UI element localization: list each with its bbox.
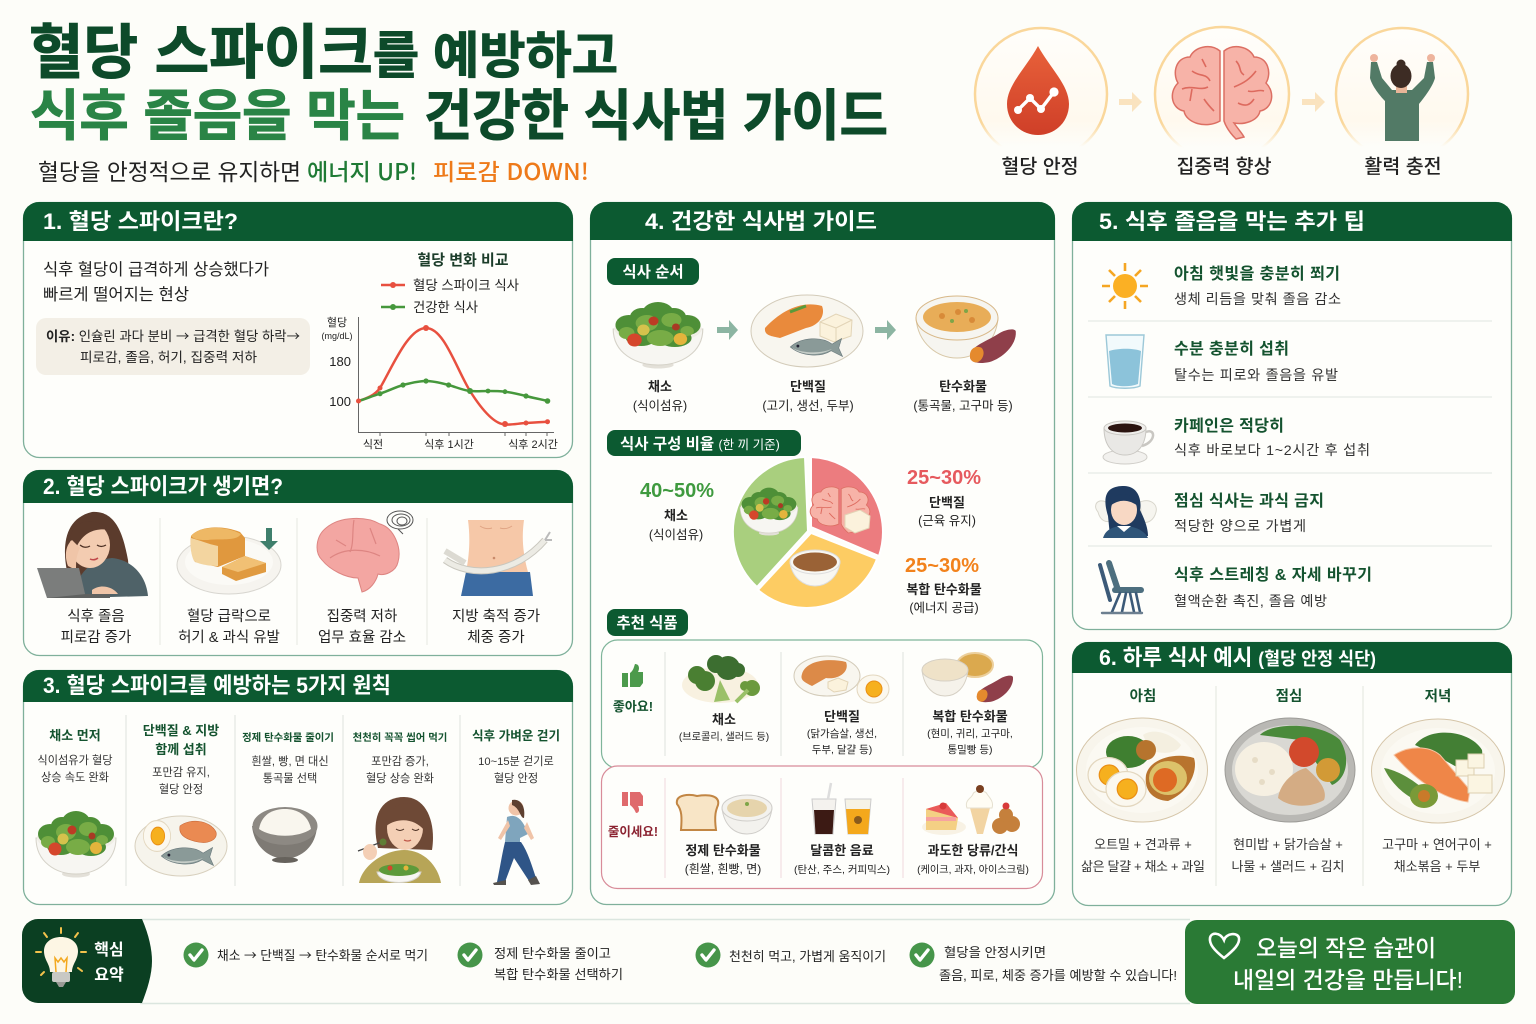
benefit: focus improvement: 집중력 향상	[1176, 156, 1272, 178]
title: 식후 졸음을 막는	[30, 85, 405, 147]
panel: 1 what is a blood sugar spike	[23, 202, 573, 458]
caption: fat storage: 체중 증가	[467, 629, 525, 646]
food: vegetables: (브로콜리, 샐러드 등)	[679, 731, 769, 743]
summary item 2: 복합 탄수화물 선택하기	[494, 967, 623, 982]
principle 4 text: 포만감 증가,	[371, 755, 429, 768]
summary item 3: 천천히 먹고, 가볍게 움직이기	[729, 949, 886, 964]
header 4	[590, 202, 1055, 240]
summary item 4	[910, 942, 1177, 983]
closing message text: 내일의 건강을 만듭니다!	[1233, 967, 1463, 993]
meal: lunch: 점심	[1276, 688, 1302, 705]
meal order: carbohydrates: 탄수화물	[939, 379, 987, 394]
line chart: blood sugar comparison: 혈당	[327, 315, 347, 329]
icon: thumbs up	[622, 664, 643, 687]
panel: good foods	[602, 640, 1042, 768]
icon: waist with measuring tape	[445, 520, 552, 596]
subtitle	[38, 153, 589, 187]
panel: key summary bar	[22, 919, 1515, 1004]
reason box: 이유: 인슐린 과다 분비 → 급격한 혈당 하락→	[46, 325, 300, 345]
pill: meal ratio	[607, 430, 801, 456]
food: protein: 단백질	[824, 709, 860, 724]
tip 2 text	[1174, 340, 1338, 384]
icon: coffee cup	[1103, 421, 1153, 464]
tip 2 text: 탈수는 피로와 졸음을 유발	[1174, 368, 1338, 384]
tip 3 text: 카페인은 적당히	[1174, 417, 1284, 435]
icon: woman eating slowly	[358, 797, 441, 883]
meal order: protein: (고기, 생선, 두부)	[762, 399, 854, 413]
label: good: 좋아요!	[613, 699, 653, 714]
benefit: blood sugar stability	[975, 28, 1107, 178]
line chart: blood sugar comparison: 식후 1시간	[424, 438, 474, 451]
caption: hunger: 혈당 급락으로	[187, 608, 271, 625]
food: protein	[794, 656, 889, 756]
food: sugary snacks: 과도한 당류/간식	[928, 843, 1018, 858]
subtitle: 혈당을 안정적으로 유지하면	[38, 159, 301, 185]
benefit: energy recharge: 활력 충전	[1364, 156, 1442, 178]
closing message text	[1233, 935, 1463, 993]
header 6	[1072, 642, 1512, 673]
principle 4 text: 혈당 상승 완화	[366, 771, 434, 785]
panel: 4 healthy eating guide	[590, 202, 1055, 904]
line chart: blood sugar comparison	[321, 252, 558, 451]
principle 5 text: 혈당 안정	[494, 771, 538, 785]
pie label: complex carbs: 복합 탄수화물	[906, 582, 982, 597]
line chart: blood sugar comparison: 식후 2시간	[508, 438, 558, 451]
heading 3: 3. 혈당 스파이크를 예방하는 5가지 원칙	[43, 673, 391, 698]
arrow: vegetables to protein	[717, 320, 738, 340]
caption: drowsiness	[61, 608, 131, 646]
summary tab	[22, 919, 152, 1003]
food: sweet drinks: 달콤한 음료	[810, 843, 874, 858]
heading 1: 1. 혈당 스파이크란?	[43, 209, 238, 234]
meal: lunch: 나물 + 샐러드 + 김치	[1232, 859, 1344, 874]
tip 1 text: 아침 햇빛을 충분히 쬐기	[1174, 264, 1340, 283]
title	[29, 20, 888, 147]
closing message box	[1185, 920, 1515, 1004]
tip 2 text: 수분 충분히 섭취	[1174, 340, 1289, 358]
meal order: protein	[751, 295, 863, 413]
arrow: focus to energy	[1302, 92, 1325, 112]
subtitle: 피로감 DOWN!	[433, 153, 589, 187]
pie label: vegetables: 40~50%	[640, 480, 714, 502]
principle 2 text: 포만감 유지,	[152, 766, 210, 779]
icon: woman napping	[1096, 486, 1156, 538]
icon: light bulb	[36, 928, 86, 987]
summary label: 요약	[94, 966, 124, 984]
panel: 5 additional tips	[1072, 202, 1512, 630]
principle 2 text: 함께 섭취	[155, 742, 207, 757]
tip 5 text: 혈액순환 촉진, 졸음 예방	[1174, 594, 1327, 610]
meal order: protein: 단백질	[790, 379, 826, 394]
caption: hunger: 허기 & 과식 유발	[178, 629, 280, 646]
tip 4 text: 적당한 양으로 가볍게	[1174, 519, 1306, 535]
principle 2 text: 단백질 & 지방	[143, 723, 219, 738]
principle 2 text: 혈당 안정	[159, 782, 203, 796]
line chart: blood sugar comparison: 180	[329, 354, 351, 369]
tip 4 text	[1174, 492, 1324, 535]
icon: walking person	[493, 800, 540, 885]
caption: drowsiness: 식후 졸음	[67, 608, 125, 625]
food: sweet drinks: (탄산, 주스, 커피믹스)	[794, 864, 890, 876]
caption: focus drop: 집중력 저하	[327, 608, 397, 625]
principle 3 text: 통곡물 선택	[263, 772, 317, 785]
label: reduce: 줄이세요!	[608, 825, 658, 839]
heading 4: 4. 건강한 식사법 가이드	[645, 209, 877, 234]
meal order: vegetables: (식이섬유)	[633, 399, 687, 413]
benefit: focus improvement	[1155, 27, 1289, 178]
caption: focus drop	[318, 608, 406, 646]
line chart: blood sugar comparison: 식전	[363, 438, 383, 451]
tip 1 text	[1174, 264, 1341, 308]
food: sweet drinks	[794, 783, 890, 876]
meal: lunch: 현미밥 + 닭가슴살 +	[1233, 837, 1343, 852]
icon: plate with egg salmon fish	[135, 816, 227, 876]
caption: drowsiness: 피로감 증가	[61, 629, 131, 646]
pill: meal ratio: 식사 구성 비율 (한 끼 기준)	[620, 435, 780, 453]
pie label: complex carbs: (에너지 공급)	[909, 601, 979, 615]
pie chart: meal composition	[733, 457, 883, 608]
line chart: blood sugar comparison: 100	[329, 394, 351, 409]
principle 3 text	[242, 731, 334, 785]
meal order: vegetables	[613, 302, 703, 413]
principle 1 text: 식이섬유가 혈당	[37, 753, 113, 767]
definition text	[43, 260, 269, 304]
line chart: blood sugar comparison: 혈당 변화 비교	[417, 252, 509, 269]
principle 5 text: 10~15분 걷기로	[478, 755, 554, 768]
pie label: vegetables: (식이섬유)	[649, 528, 703, 542]
summary item 3	[696, 942, 886, 968]
pie label: protein	[907, 467, 981, 528]
meal: dinner: 고구마 + 연어구이 +	[1382, 837, 1492, 852]
pill: meal order: 식사 순서	[622, 263, 684, 281]
pie label: vegetables	[640, 480, 714, 542]
icon: thumbs down	[622, 792, 643, 813]
heading 5: 5. 식후 졸음을 막는 추가 팁	[1099, 209, 1365, 234]
definition text: 식후 혈당이 급격하게 상승했다가	[43, 260, 269, 279]
header 5	[1072, 202, 1512, 241]
closing message text: 오늘의 작은 습관이	[1256, 935, 1436, 961]
food: protein: 두부, 달걀 등)	[812, 743, 872, 756]
caption: hunger	[178, 608, 280, 646]
food: complex carbs	[922, 653, 1013, 756]
caption: fat storage: 지방 축적 증가	[452, 608, 540, 625]
pill: meal order	[607, 258, 699, 285]
principle 4 text	[353, 731, 447, 785]
arrow: stability to focus	[1119, 92, 1142, 112]
panel: 6 daily meal example	[1072, 642, 1512, 906]
icon: bread plate with down arrow	[177, 527, 281, 594]
principle 1 text: 상승 속도 완화	[41, 771, 109, 784]
principle 5 text	[472, 729, 560, 785]
heading 6: 6. 하루 식사 예시 (혈당 안정 식단)	[1099, 645, 1376, 670]
food: complex carbs: 통밀빵 등)	[947, 744, 993, 756]
icon: chair	[1100, 563, 1142, 613]
principle 3 text: 흰쌀, 빵, 면 대신	[251, 755, 329, 768]
food: complex carbs: 복합 탄수화물	[932, 709, 1008, 724]
icon: drowsy woman at laptop	[37, 512, 148, 598]
pie label: complex carbs	[905, 555, 982, 615]
summary item 2	[458, 942, 623, 982]
summary label: 핵심	[94, 940, 124, 959]
principle 4 text: 천천히 꼭꼭 씹어 먹기	[353, 731, 447, 744]
food: refined carbs	[677, 795, 772, 876]
summary item 1	[184, 942, 428, 968]
meal: lunch	[1225, 688, 1355, 874]
meal: dinner: 저녁	[1425, 688, 1451, 705]
meal: breakfast: 삶은 달걀 + 채소 + 과일	[1081, 859, 1205, 874]
meal order: vegetables: 채소	[648, 379, 672, 394]
meal order: carbohydrates: (통곡물, 고구마 등)	[913, 399, 1013, 413]
principle 1 text: 채소 먼저	[49, 728, 101, 743]
principle 5 text: 식후 가벼운 걷기	[472, 729, 560, 743]
meal: breakfast: 아침	[1130, 688, 1156, 705]
title: 건강한 식사법 가이드	[424, 85, 888, 147]
food: complex carbs: (현미, 귀리, 고구마,	[927, 728, 1013, 740]
line chart: blood sugar comparison: (mg/dL)	[321, 331, 353, 341]
summary item 1: 채소 → 단백질 → 탄수화물 순서로 먹기	[217, 945, 428, 964]
food: vegetables: 채소	[712, 712, 736, 727]
pill: recommended foods	[607, 609, 688, 636]
summary item 4: 졸음, 피로, 체중 증가를 예방할 수 있습니다!	[939, 968, 1177, 983]
panel: foods to reduce	[602, 766, 1042, 888]
title: 혈당 스파이크를 예방하고	[29, 20, 618, 86]
benefit: blood sugar stability: 혈당 안정	[1001, 156, 1079, 178]
food: sugary snacks	[917, 785, 1029, 876]
principle 1 text	[37, 728, 113, 784]
tip 3 text	[1174, 417, 1370, 459]
definition text: 빠르게 떨어지는 현상	[43, 285, 189, 304]
summary item 2: 정제 탄수화물 줄이고	[494, 946, 611, 961]
icon: glass of water	[1106, 335, 1144, 388]
pie label: complex carbs: 25~30%	[905, 555, 979, 577]
meal order: carbohydrates	[913, 296, 1016, 413]
principle 2 text	[143, 723, 219, 796]
tip 3 text: 식후 바로보다 1~2시간 후 섭취	[1174, 443, 1370, 459]
header 3	[23, 670, 573, 702]
meal: dinner: 채소볶음 + 두부	[1394, 859, 1480, 874]
panel: 2 effects of spikes	[23, 470, 573, 656]
pill: recommended foods: 추천 식품	[616, 614, 678, 632]
icon: white rice bowl	[252, 807, 318, 863]
principle 3 text: 정제 탄수화물 줄이기	[242, 731, 334, 744]
header 1	[23, 202, 573, 241]
summary label	[94, 940, 124, 984]
tip 5 text: 식후 스트레칭 & 자세 바꾸기	[1174, 566, 1372, 584]
pie label: vegetables: 채소	[664, 508, 688, 523]
reason box	[36, 318, 310, 375]
icon: sun	[1102, 263, 1148, 309]
icon: brain with tangled thought	[317, 511, 413, 592]
pie label: protein: (근육 유지)	[918, 514, 976, 528]
meal: dinner	[1372, 688, 1504, 874]
benefit: energy recharge	[1336, 28, 1468, 178]
food: sugary snacks: (케이크, 과자, 아이스크림)	[917, 864, 1029, 876]
tip 1 text: 생체 리듬을 맞춰 졸음 감소	[1174, 292, 1341, 308]
food: refined carbs: 정제 탄수화물	[685, 843, 761, 858]
panel: 3 five prevention principles	[23, 670, 573, 904]
line chart: blood sugar comparison: 건강한 식사	[413, 300, 479, 315]
food: protein: (닭가슴살, 생선,	[807, 728, 877, 740]
meal: breakfast: 오트밀 + 견과류 +	[1094, 837, 1192, 852]
subtitle: 에너지 UP!	[307, 153, 417, 187]
caption: focus drop: 업무 효율 감소	[318, 629, 406, 646]
heading 2: 2. 혈당 스파이크가 생기면?	[43, 474, 283, 499]
tip 4 text: 점심 식사는 과식 금지	[1174, 492, 1324, 510]
summary item 4: 혈당을 안정시키면	[944, 945, 1046, 960]
caption: fat storage	[452, 608, 540, 646]
pie label: protein: 25~30%	[907, 467, 981, 489]
line chart: blood sugar comparison: 혈당 스파이크 식사	[413, 278, 520, 293]
icon: heart outline	[1210, 934, 1239, 958]
pie label: protein: 단백질	[929, 495, 965, 510]
reason box: 피로감, 졸음, 허기, 집중력 저하	[80, 350, 258, 365]
arrow: protein to carbs	[875, 320, 896, 340]
meal: breakfast	[1076, 688, 1208, 874]
food: vegetables	[679, 655, 769, 743]
tip 5 text	[1174, 566, 1372, 610]
header 2	[23, 470, 573, 503]
icon: salad bowl	[36, 811, 116, 878]
food: refined carbs: (흰쌀, 흰빵, 면)	[685, 862, 761, 876]
